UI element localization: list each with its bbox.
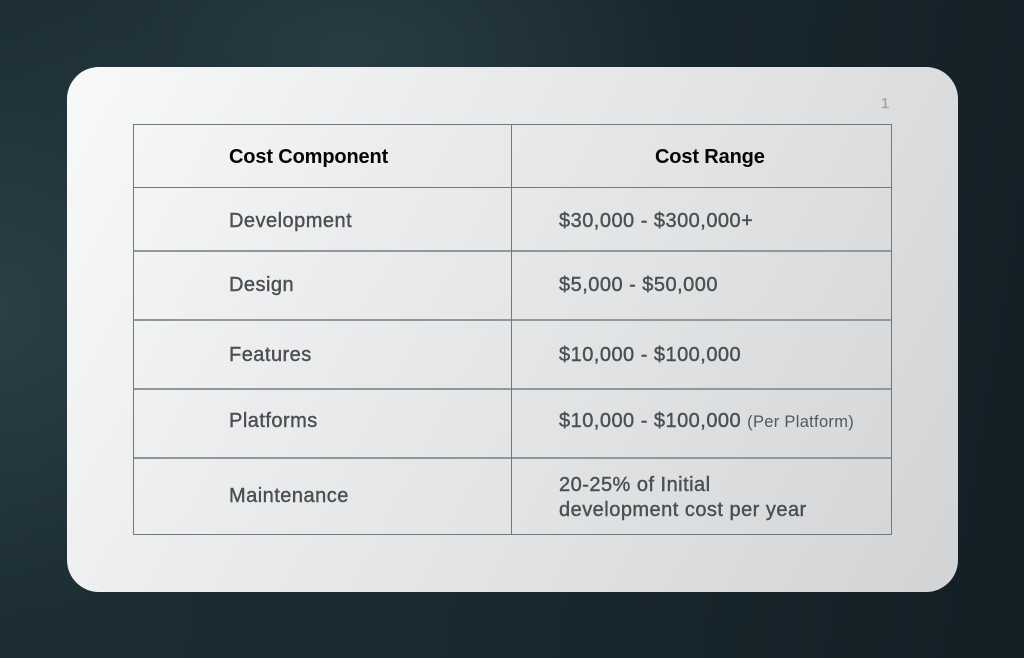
page number: 1	[881, 95, 890, 112]
table header: cost component: Cost Component	[229, 146, 388, 168]
row label: development: Development	[229, 210, 352, 232]
row label: maintenance: Maintenance	[229, 485, 349, 507]
table	[133, 124, 892, 535]
row value: features: $10,000 - $100,000	[559, 344, 741, 366]
row label: design: Design	[229, 274, 294, 296]
row value: maintenance: development cost per year	[559, 499, 807, 521]
panel: cost table card	[67, 67, 958, 592]
row value: design: $5,000 - $50,000	[559, 274, 718, 296]
row label: features: Features	[229, 344, 312, 366]
row value: maintenance: 20-25% of Initial	[559, 474, 711, 496]
row label: platforms: Platforms	[229, 410, 318, 432]
row value: maintenance	[559, 474, 807, 521]
table header: cost range: Cost Range	[655, 146, 765, 168]
row value: development: $30,000 - $300,000+	[559, 210, 753, 232]
row value: platforms: $10,000 - $100,000 (Per Platform)	[559, 410, 854, 432]
